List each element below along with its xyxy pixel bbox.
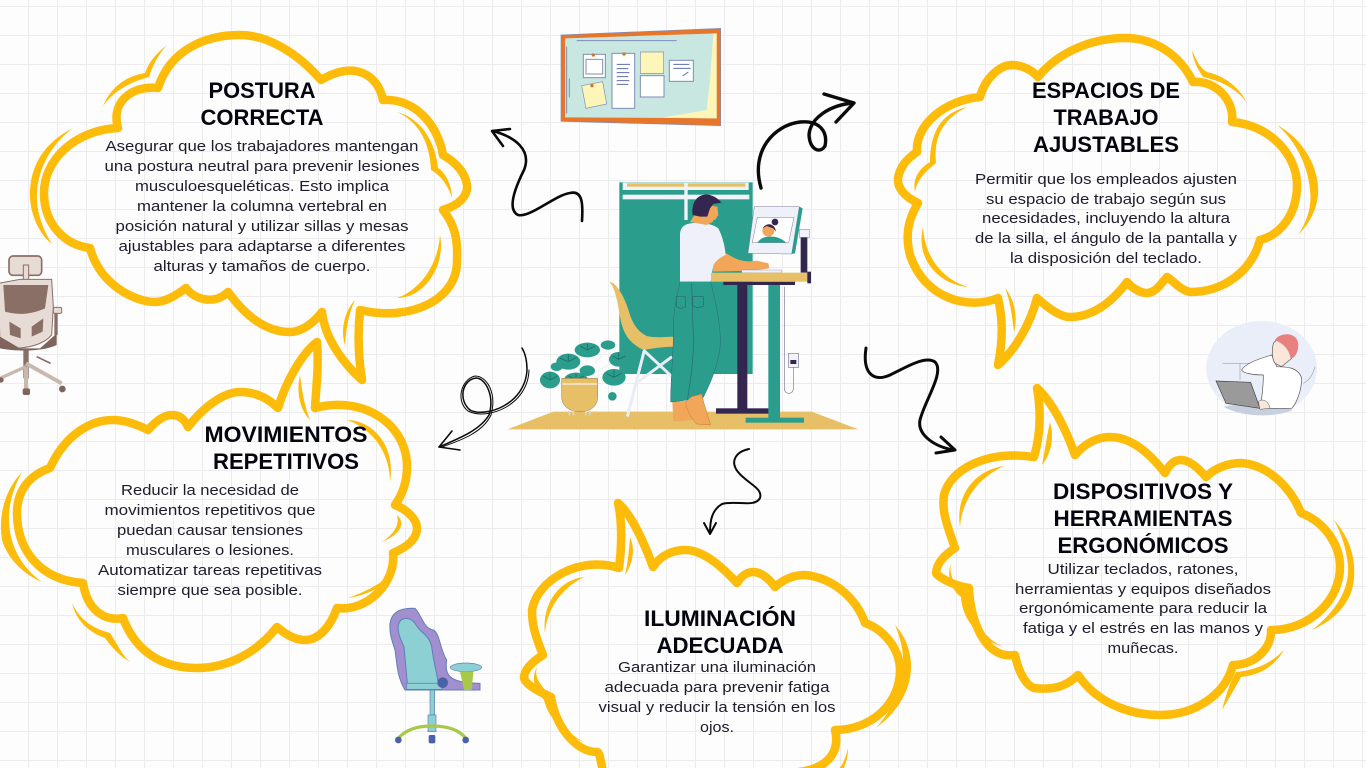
heading: AJUSTABLES: [1033, 132, 1179, 157]
body text: herramientas y equipos diseñados: [1015, 581, 1271, 598]
heading: [644, 606, 796, 658]
heading: [204, 422, 368, 474]
panel: postura correcta: [30, 35, 467, 380]
panel: movimientos repetitivos: [1, 342, 417, 668]
heading: ADECUADA: [656, 633, 784, 658]
body text: posición natural y utilizar sillas y mesas: [116, 218, 408, 235]
window panel: [619, 182, 753, 374]
body text: Garantizar una iluminación: [618, 659, 816, 676]
heading: HERRAMIENTAS: [1054, 506, 1232, 531]
panel: dispositivos y herramientas: [936, 388, 1354, 715]
monitor: [748, 207, 809, 273]
heading: ESPACIOS DE: [1032, 78, 1180, 103]
body text: una postura neutral para prevenir lesiones: [104, 158, 420, 175]
body text: movimientos repetitivos que: [104, 502, 316, 519]
body text: [598, 659, 836, 736]
body text: la disposición del teclado.: [1010, 250, 1202, 267]
body text: [975, 171, 1238, 267]
body text: puedan causar tensiones: [117, 522, 303, 539]
heading: POSTURA: [208, 78, 316, 103]
panel: espacios de trabajo ajustables: [898, 38, 1318, 365]
body text: adecuada para prevenir fatiga: [604, 679, 830, 696]
body text: ojos.: [700, 719, 734, 736]
body text: musculares o lesiones.: [126, 542, 294, 559]
heading: CORRECTA: [200, 105, 324, 130]
bubble outline: [898, 38, 1318, 365]
arrow: to espacios: [758, 94, 854, 188]
body text: su espacio de trabajo según sus: [986, 191, 1226, 208]
body text: Reducir la necesidad de: [121, 482, 299, 499]
chair: [609, 282, 675, 417]
arrow: to dispositivos: [865, 348, 955, 453]
heading: [1053, 479, 1233, 558]
body text: necesidades, incluyendo la altura: [982, 210, 1231, 227]
body text: Utilizar teclados, ratones,: [1048, 561, 1238, 578]
body text: siempre que sea posible.: [118, 582, 302, 599]
body text: Asegurar que los trabajadores mantengan: [106, 138, 418, 155]
body text: muñecas.: [1108, 640, 1178, 657]
body text: [1015, 561, 1271, 657]
body text: Permitir que los empleados ajusten: [975, 171, 1237, 188]
panel: iluminacion adecuada: [524, 503, 911, 768]
bubble outline: [936, 388, 1354, 715]
body text: visual y reducir la tensión en los: [598, 699, 836, 716]
icon: person with neck pain at laptop: [1206, 321, 1317, 416]
body text: alturas y tamaños de cuerpo.: [154, 258, 370, 275]
body text: fatiga y el estrés en las manos y: [1023, 620, 1264, 637]
desk top and keyboard: [711, 270, 811, 283]
person: [671, 194, 769, 425]
body text: [98, 482, 322, 599]
heading: [1032, 78, 1180, 157]
arrow: to postura: [492, 129, 582, 221]
icon: office chair beige: [0, 256, 66, 395]
bubble outline: [524, 503, 911, 768]
body text: [104, 138, 420, 275]
body text: Automatizar tareas repetitivas: [98, 562, 322, 579]
icon: gaming chair: [390, 608, 482, 743]
illustration: person at standing desk: [507, 182, 858, 429]
heading: TRABAJO: [1054, 105, 1158, 130]
body text: de la silla, el ángulo de la pantalla y: [975, 230, 1238, 247]
bubble outline: [1, 342, 417, 668]
arrow: to iluminacion: [704, 449, 760, 534]
body text: mantener la columna vertebral en: [137, 198, 387, 215]
heading: DISPOSITIVOS Y: [1053, 479, 1233, 504]
body text: musculoesqueléticas. Esto implica: [135, 178, 390, 195]
body text: ergonómicamente para reducir la: [1019, 600, 1268, 617]
heading: [200, 78, 324, 130]
icon: notice board: [561, 28, 721, 126]
arrow: to movimientos: [439, 348, 529, 450]
heading: REPETITIVOS: [213, 449, 359, 474]
heading: ILUMINACIÓN: [644, 606, 796, 631]
heading: ERGONÓMICOS: [1058, 533, 1228, 558]
body text: ajustables para adaptarse a diferentes: [118, 238, 406, 255]
plant: [540, 340, 628, 415]
desk legs: [716, 282, 804, 423]
heading: MOVIMIENTOS: [204, 422, 368, 447]
rug: [507, 412, 858, 429]
bubble outline: [30, 35, 467, 380]
